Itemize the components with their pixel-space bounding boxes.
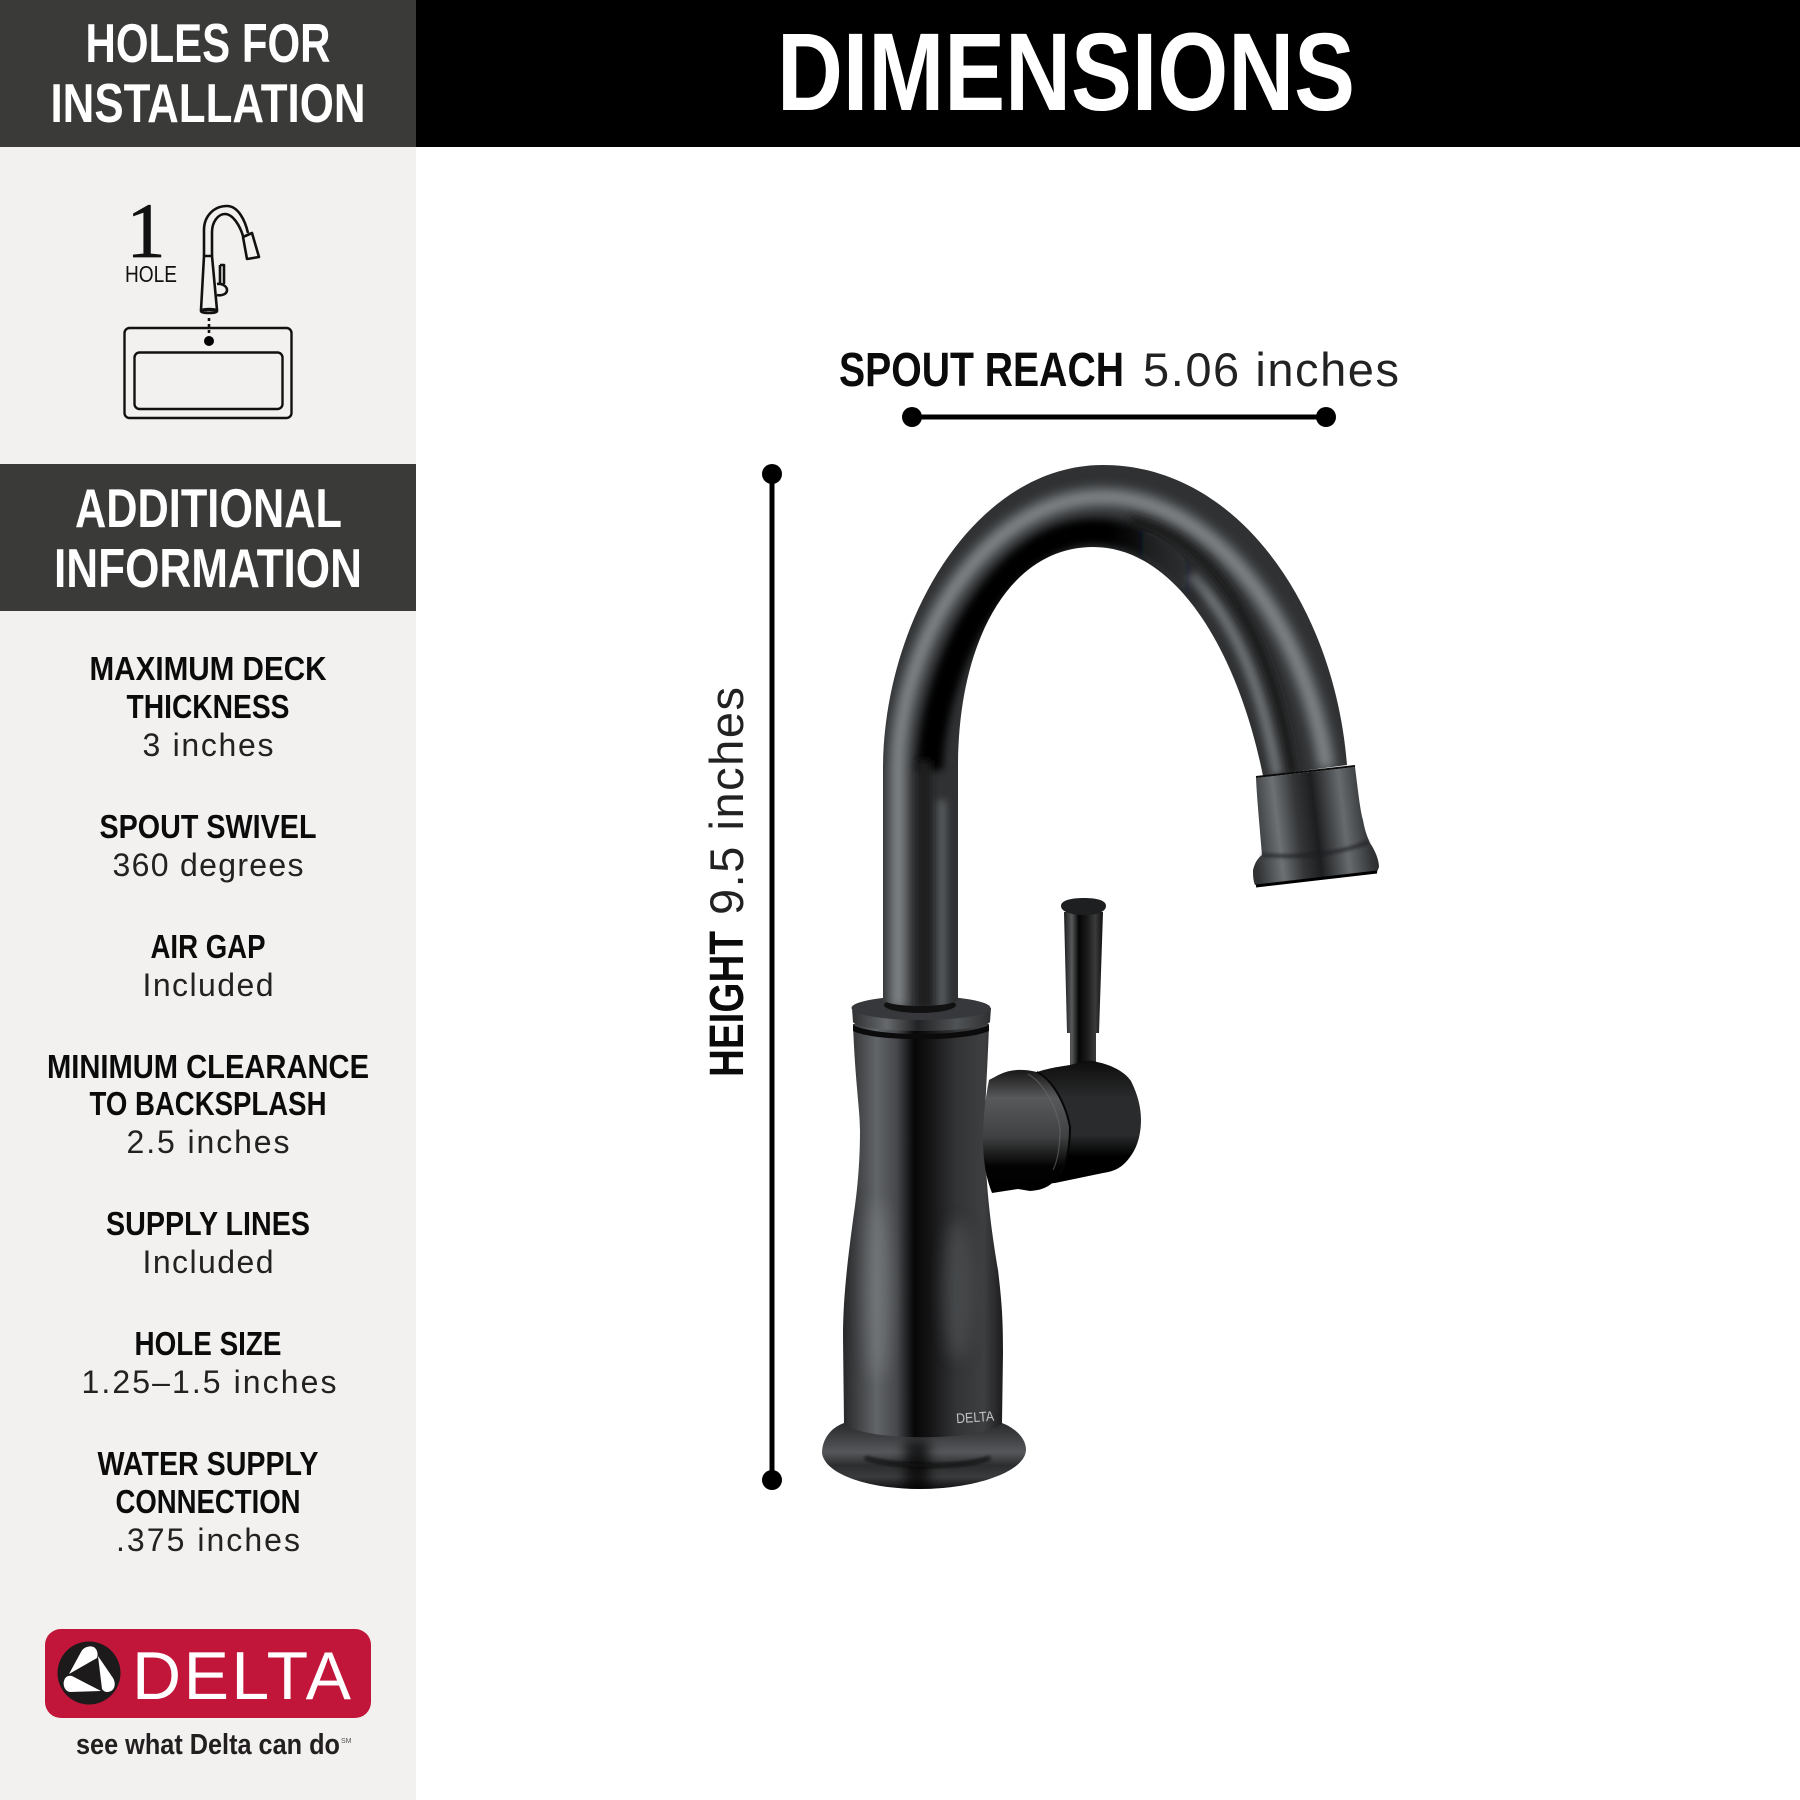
- spec: minimum clearance to backsplash: [47, 1048, 369, 1160]
- label: 1 hole: 1: [126, 187, 166, 274]
- spec: air gap: Included: [142, 967, 274, 1003]
- base: [822, 1423, 1026, 1489]
- heading: holes for installation: [0, 0, 416, 147]
- spec: minimum clearance to backsplash: 2.5 inches: [126, 1124, 290, 1160]
- heading: holes for installation: INSTALLATION: [50, 72, 366, 134]
- title: dimensions banner: [416, 0, 1800, 147]
- label: 1 hole: [125, 187, 177, 287]
- spout tube: [883, 465, 1347, 1010]
- icon: small faucet outline: [201, 206, 259, 313]
- icon: one hole sink with faucet: [124, 187, 292, 418]
- heading: additional information: ADDITIONAL: [75, 477, 342, 539]
- spec: hole size: 1.25–1.5 inches: [82, 1364, 336, 1400]
- logo: delta: [45, 1629, 371, 1761]
- title: dimensions banner: DIMENSIONS: [777, 11, 1355, 134]
- spec: water supply connection: WATER SUPPLY: [98, 1445, 318, 1482]
- spec: maximum deck thickness: MAXIMUM DECK: [90, 650, 327, 687]
- spout head: [1253, 766, 1379, 886]
- dimension: spout reach: 5.06 inches: [1143, 343, 1399, 396]
- dimension: spout reach: [839, 343, 1399, 427]
- spec: hole size: HOLE SIZE: [134, 1325, 282, 1362]
- dimension: height: [700, 464, 782, 1490]
- sidebar background panel: [0, 0, 416, 1800]
- spec: supply lines: Included: [142, 1244, 274, 1280]
- heading: additional information: [0, 464, 416, 611]
- collar: [852, 996, 991, 1039]
- spec: minimum clearance to backsplash: MINIMUM CLEARANCE: [47, 1048, 369, 1085]
- faucet brand mark: DELTA: [956, 1408, 995, 1426]
- dimension: height: HEIGHT: [701, 931, 754, 1077]
- icon: delta triangle emblem: [58, 1642, 120, 1704]
- spec: water supply connection: [98, 1445, 318, 1558]
- spec: maximum deck thickness: 3 inches: [142, 727, 274, 763]
- wordmark: DELTA: [132, 1638, 352, 1714]
- spec: water supply connection: CONNECTION: [116, 1483, 300, 1520]
- handle: [983, 898, 1141, 1193]
- label: 1 hole: HOLE: [125, 261, 177, 287]
- tagline: see what Delta can do: [76, 1729, 340, 1761]
- spec: supply lines: SUPPLY LINES: [106, 1205, 310, 1242]
- spec: supply lines: [106, 1205, 310, 1280]
- service mark: SM: [341, 1738, 352, 1745]
- spec: minimum clearance to backsplash: TO BACKSPLASH: [90, 1085, 326, 1122]
- icon: sink outline with hole: [124, 318, 292, 418]
- dimension: spout reach: SPOUT REACH: [839, 344, 1124, 397]
- body: [843, 1024, 1003, 1437]
- dimension: height: 9.5 inches: [700, 687, 753, 915]
- spec: spout swivel: [100, 808, 316, 883]
- heading: holes for installation: HOLES FOR: [86, 12, 330, 74]
- spec: spout swivel: 360 degrees: [112, 847, 304, 883]
- spec: air gap: [142, 928, 274, 1003]
- spec: water supply connection: .375 inches: [116, 1522, 300, 1558]
- spec: spout swivel: SPOUT SWIVEL: [100, 808, 316, 845]
- spec: hole size: [82, 1325, 336, 1400]
- faucet illustration: [822, 465, 1379, 1500]
- spec: air gap: AIR GAP: [150, 928, 266, 965]
- heading: additional information: INFORMATION: [54, 537, 362, 599]
- spec: maximum deck thickness: THICKNESS: [126, 688, 290, 725]
- spec: maximum deck thickness: [90, 650, 327, 763]
